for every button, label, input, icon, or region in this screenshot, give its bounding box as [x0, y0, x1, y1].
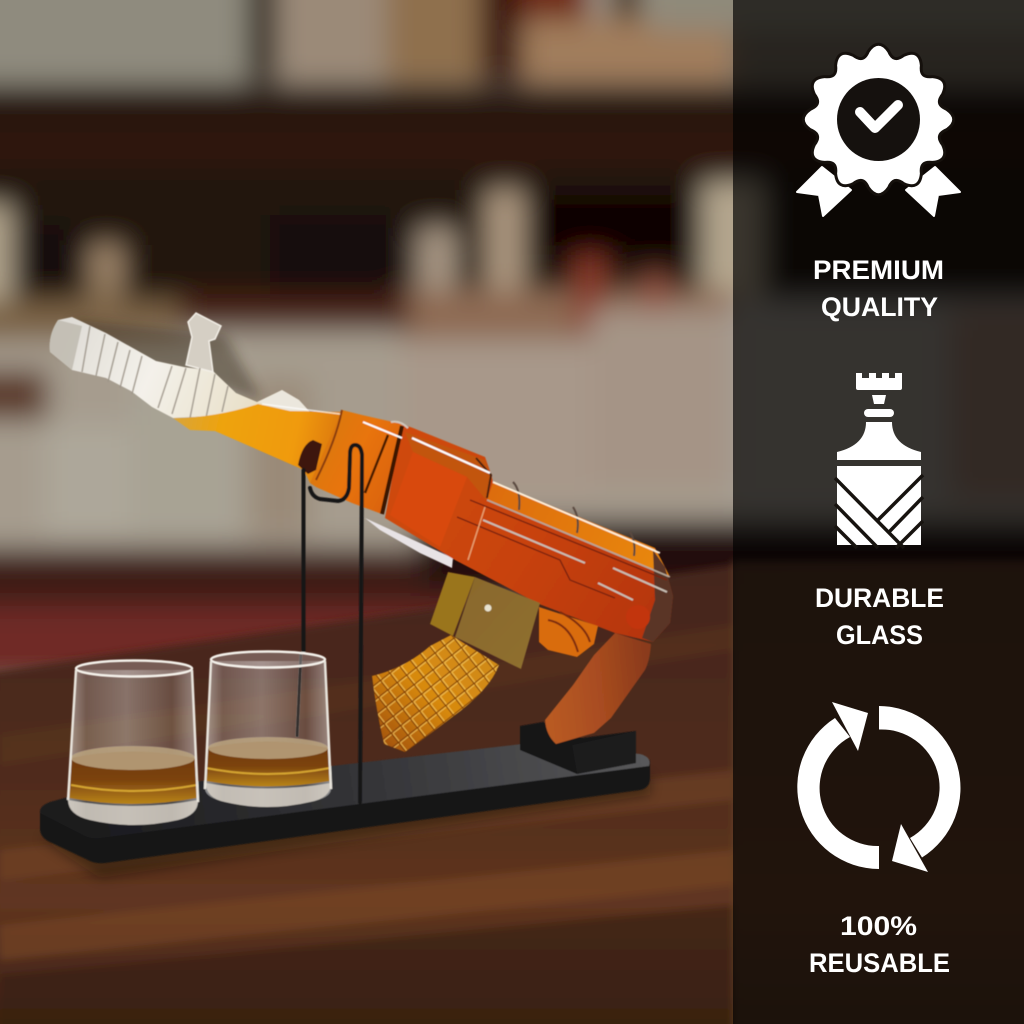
icon: premium badge: [797, 46, 960, 216]
right whisky glass: [205, 652, 331, 807]
label: premium quality: PREMIUM: [813, 255, 944, 285]
magazine with ribbed grid: [372, 635, 499, 752]
left whisky glass: [68, 660, 198, 825]
label: premium quality: QUALITY: [821, 292, 938, 322]
label: durable glass: [815, 583, 944, 650]
engraved lines and highlights: [262, 404, 670, 600]
white wedge under the body: [365, 518, 453, 568]
mount block back: [520, 722, 636, 774]
wooden grip: [545, 633, 651, 744]
label: 100% reusable: REUSABLE: [809, 948, 950, 978]
bolt knob: [626, 605, 650, 629]
product shadow: [40, 320, 650, 878]
icon: bottle: [835, 373, 923, 548]
side panel: [733, 0, 1024, 1024]
label: durable glass: GLASS: [836, 620, 923, 650]
rear dark glass end: [642, 550, 673, 642]
label: 100% reusable: 100%: [840, 911, 917, 941]
dark clasp on the barrel: [298, 440, 322, 474]
label: premium quality: [813, 255, 944, 322]
black display base: [40, 744, 650, 863]
label: durable glass: DURABLE: [815, 583, 944, 613]
collar section: [310, 410, 402, 514]
metal wire stand: [304, 445, 362, 802]
trigger guard glass: [539, 607, 598, 657]
brass plate with rivet: [455, 577, 540, 669]
magazine translucent collar: [430, 572, 475, 636]
mount block front: [572, 731, 636, 774]
upper rear section: [487, 482, 670, 577]
amber barrel liquid: [173, 404, 342, 483]
hand guard top band: [405, 432, 491, 500]
label: 100% reusable: [809, 911, 950, 978]
product: decanter set: [40, 313, 673, 863]
clear glass muzzle and barrel: [50, 313, 310, 418]
hand guard bright panel: [390, 452, 467, 547]
icon: recycle arrows: [797, 702, 960, 872]
receiver body: [385, 424, 673, 642]
